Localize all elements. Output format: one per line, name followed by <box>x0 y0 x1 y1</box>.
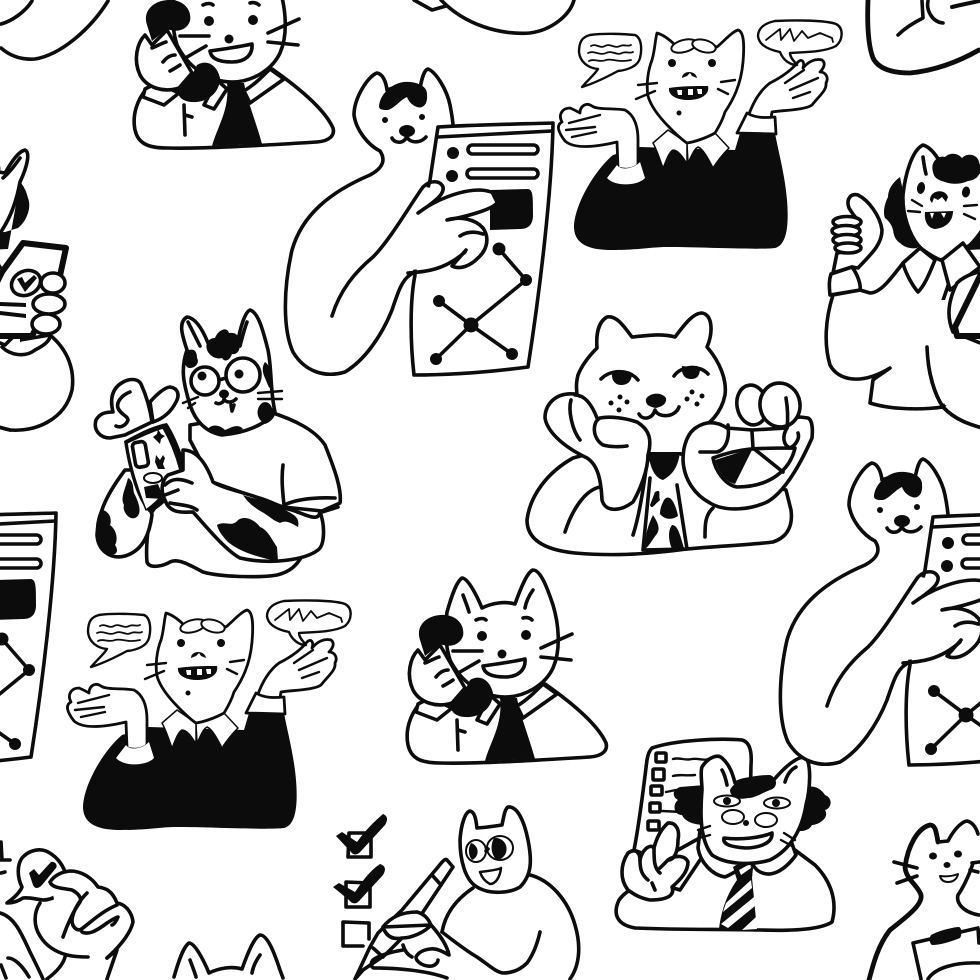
repeated speech bubble cat, lower left <box>67 600 351 830</box>
wrist <box>0 913 117 979</box>
left speech bubble <box>579 34 641 87</box>
handset <box>419 615 493 717</box>
cat face <box>379 82 427 142</box>
smartphone with check <box>955 243 980 336</box>
tablet list rows <box>446 145 538 230</box>
top curly hair <box>932 154 980 184</box>
white collar <box>653 130 729 168</box>
collar <box>698 830 796 877</box>
right speech bubble <box>758 20 842 65</box>
pointing hand <box>622 823 688 900</box>
round body of wrapped part <box>943 335 980 430</box>
checked boxes <box>333 814 387 946</box>
head <box>182 310 275 435</box>
phone cat ears, bottom edge <box>174 935 283 978</box>
collars <box>416 684 557 724</box>
writing hand <box>371 912 449 978</box>
face <box>894 850 979 883</box>
head <box>701 756 810 863</box>
head <box>903 145 980 260</box>
fist <box>35 871 133 958</box>
cat pointing up with striped tie <box>616 739 834 930</box>
hand holding handset <box>409 645 465 705</box>
body <box>407 684 606 763</box>
curly hair back <box>674 785 831 831</box>
repeated tablet edge, left side <box>0 459 56 765</box>
thumbs up cat, right edge <box>826 145 980 430</box>
torso <box>826 243 963 409</box>
repeated thumbs up cat wrapping at left edge <box>0 145 73 430</box>
head <box>460 807 530 892</box>
checklist board <box>634 739 751 860</box>
arm and neck <box>285 69 454 374</box>
arm crook and hand <box>949 270 980 345</box>
hand with pie chart <box>683 380 812 509</box>
striped tie <box>719 863 757 930</box>
sleeve creases <box>565 462 713 537</box>
tie <box>485 698 535 761</box>
body <box>616 850 834 930</box>
cat writing a checklist <box>333 807 579 979</box>
shirt collar <box>903 243 980 292</box>
checklist rows <box>648 753 708 830</box>
head <box>647 30 744 143</box>
fur spots and glasses <box>183 322 282 433</box>
face <box>636 37 735 116</box>
network diagram <box>430 242 532 365</box>
left arm with spots <box>97 470 152 557</box>
supporting hand <box>545 394 650 509</box>
left hand and cuff <box>558 104 645 184</box>
clipboard cat arm, top left corner <box>1 1 108 59</box>
clipboard cat arm, top right corner <box>868 0 979 73</box>
tie with spots <box>643 450 687 550</box>
t-shirt <box>190 412 340 511</box>
arm crease <box>442 932 540 973</box>
check mark <box>29 862 57 888</box>
clipboard cat, bottom right corner <box>869 821 979 980</box>
black sweater <box>574 133 788 250</box>
check speech bubble <box>7 850 65 903</box>
phone app icons <box>132 429 165 499</box>
cat with speech bubbles, top right <box>558 20 842 250</box>
face <box>453 590 572 677</box>
head and shoulder outline <box>869 825 938 980</box>
body outline <box>442 875 579 979</box>
pen <box>355 859 453 979</box>
face <box>908 157 980 229</box>
face <box>698 767 796 848</box>
fist with check bubble, bottom left corner <box>0 842 133 979</box>
repeated phone cat, top <box>134 0 333 148</box>
raised hand fingers <box>95 380 178 438</box>
smartphone <box>124 423 187 513</box>
head <box>576 313 725 435</box>
right hand and cuff <box>737 59 827 134</box>
wavy shirt hem <box>147 500 302 577</box>
spotted cat with glasses and smartphone <box>95 310 340 577</box>
right arm with spots <box>162 450 324 561</box>
body <box>527 440 791 555</box>
face <box>601 366 708 418</box>
thumb hand and cuff <box>829 195 882 295</box>
lower edge of writing cat at top <box>414 0 574 33</box>
glasses and smile <box>466 836 513 884</box>
curly hair <box>884 177 980 250</box>
head <box>446 570 558 697</box>
cat resting chin on hand with pie chart <box>527 313 812 555</box>
pointing hand <box>334 187 496 318</box>
repeated tablet cat, right side <box>780 459 980 765</box>
cat on the phone, centre <box>407 570 606 763</box>
tablet cat, top <box>285 69 553 375</box>
neighbouring head edge and whiskers <box>1 842 10 873</box>
clipboard <box>913 928 979 979</box>
tablet <box>411 123 553 375</box>
